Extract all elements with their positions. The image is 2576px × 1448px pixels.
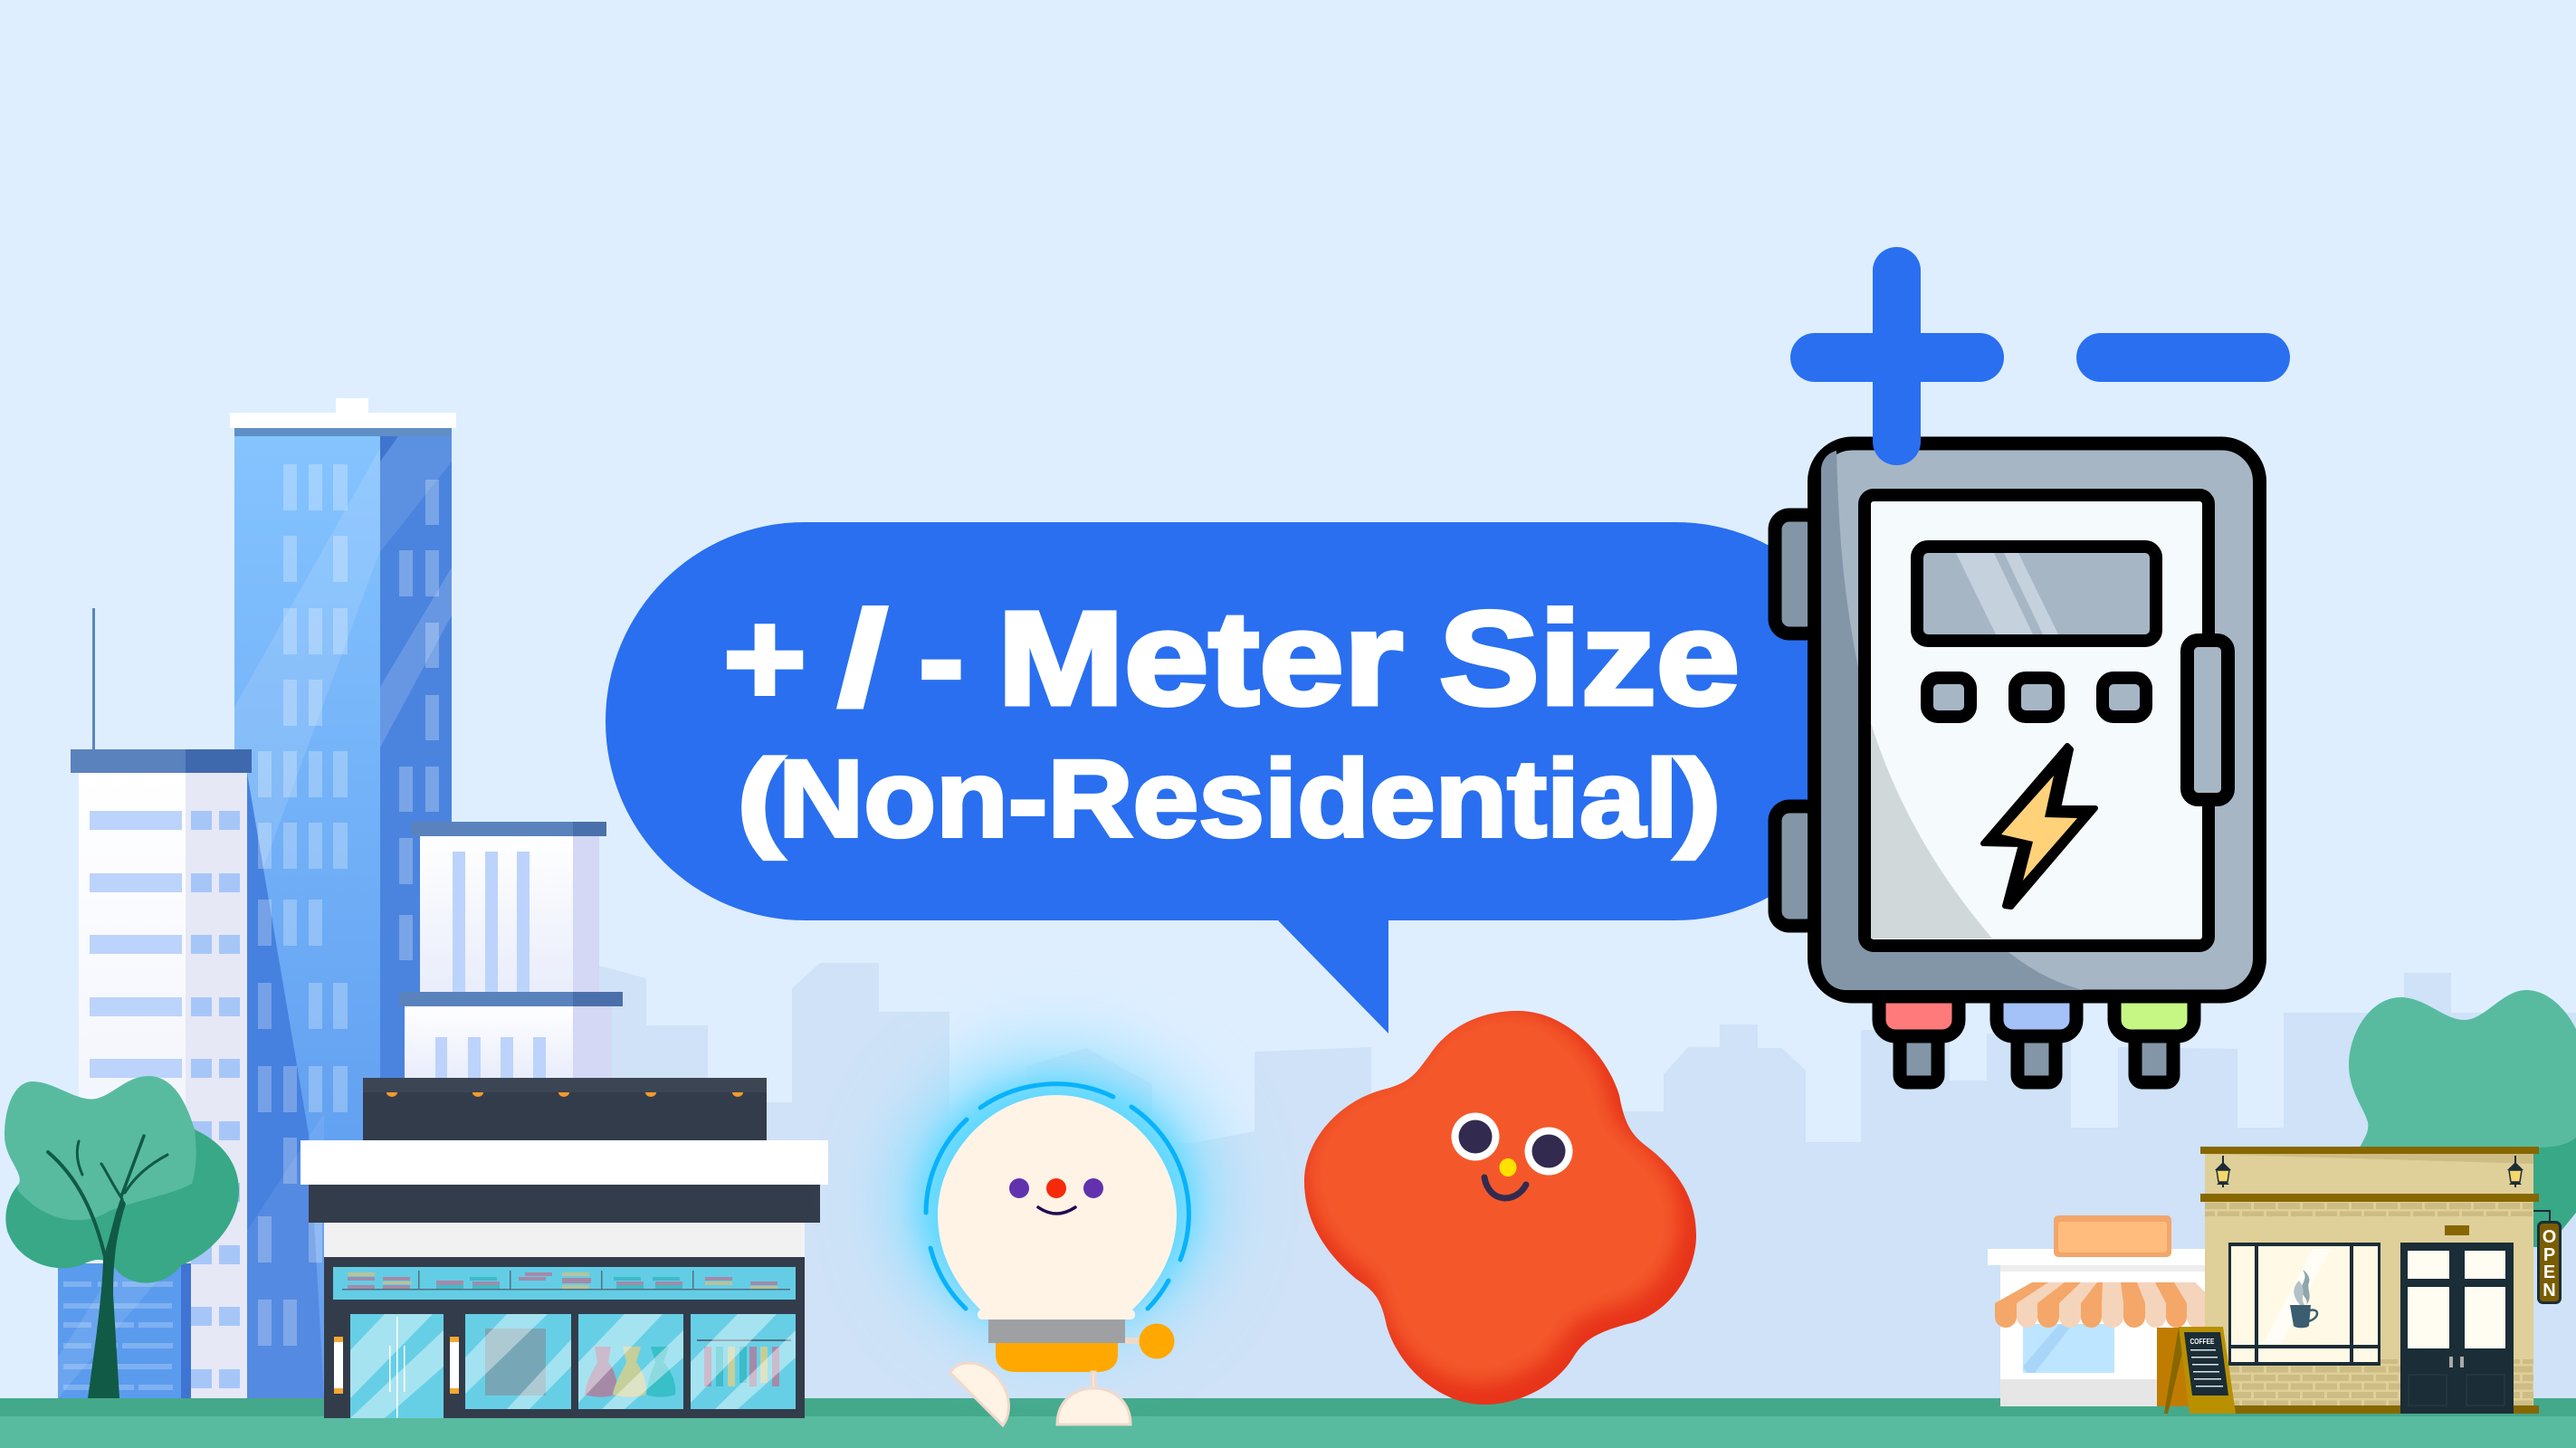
character: red blob bbox=[1304, 1009, 1696, 1405]
open sign: O bbox=[2543, 1227, 2556, 1247]
title text bbox=[723, 585, 1740, 860]
mid-rise white building bbox=[399, 822, 623, 1078]
coffee shop bbox=[2164, 1147, 2560, 1414]
meter buttons bbox=[1927, 678, 2146, 717]
icon: lightning bolt bbox=[1983, 746, 2095, 907]
title text: Size bbox=[1439, 585, 1740, 733]
store window: dresses bbox=[578, 1314, 683, 1409]
bulb face bbox=[1009, 1178, 1103, 1214]
background skyline silhouette bbox=[579, 963, 2576, 1412]
bulb glow bbox=[893, 1050, 1219, 1348]
title text: / bbox=[838, 585, 887, 733]
cafe window bbox=[2228, 1243, 2380, 1366]
meter latch bbox=[2187, 641, 2228, 800]
store upper display shelf bbox=[333, 1267, 796, 1300]
cafe double door bbox=[2400, 1243, 2514, 1414]
meter left lugs bbox=[1775, 515, 1820, 926]
meter door bbox=[1865, 495, 2209, 946]
left tree bbox=[5, 1076, 239, 1398]
meter display bbox=[1917, 547, 2156, 641]
title text: ) bbox=[1674, 737, 1722, 860]
bulb ring arcs bbox=[926, 1084, 1188, 1309]
white office tower bbox=[71, 608, 252, 1398]
small blue building bbox=[58, 1263, 191, 1398]
shop sign bbox=[2054, 1215, 2171, 1257]
clothing storefront bbox=[301, 1078, 828, 1418]
open sign: P bbox=[2543, 1245, 2555, 1265]
meter bottom connectors bbox=[1879, 986, 2194, 1082]
open sign bbox=[2533, 1211, 2560, 1303]
title text: Meter bbox=[997, 585, 1403, 733]
bulb legs and feet bbox=[950, 1363, 1131, 1425]
coffee a-board sign bbox=[2164, 1327, 2236, 1414]
icon: coffee cup bbox=[2290, 1270, 2317, 1328]
speech bubble bbox=[606, 522, 1875, 1034]
title text: - bbox=[919, 585, 964, 733]
store window: poster bbox=[465, 1314, 571, 1409]
coffee a-board sign: COFFEE bbox=[2190, 1338, 2215, 1346]
title text: + bbox=[723, 585, 806, 733]
ground bbox=[0, 1398, 2576, 1448]
title text: ( bbox=[737, 737, 785, 860]
open sign: N bbox=[2543, 1281, 2556, 1300]
meter body bbox=[1814, 443, 2259, 996]
store window: clothes rack bbox=[691, 1314, 796, 1409]
tree trunk and branches bbox=[48, 1136, 167, 1398]
right tree bbox=[2349, 990, 2576, 1247]
small white shop bbox=[1988, 1215, 2205, 1406]
character: glowing bulb bbox=[893, 1050, 1219, 1425]
striped awning bbox=[1995, 1282, 2205, 1328]
store glass door bbox=[334, 1314, 459, 1418]
open sign: E bbox=[2543, 1262, 2555, 1282]
blob face bbox=[1452, 1113, 1573, 1198]
shop window bbox=[2023, 1324, 2114, 1373]
title text: Non-Residential bbox=[778, 737, 1678, 860]
minus symbol bbox=[2076, 333, 2290, 382]
blue skyscraper bbox=[230, 398, 456, 1398]
bulb base and arm bbox=[988, 1319, 1175, 1372]
utility meter box bbox=[1775, 443, 2259, 1082]
bulb body bbox=[938, 1095, 1177, 1319]
wall lanterns bbox=[2215, 1156, 2524, 1187]
plus symbol bbox=[1790, 247, 2004, 465]
